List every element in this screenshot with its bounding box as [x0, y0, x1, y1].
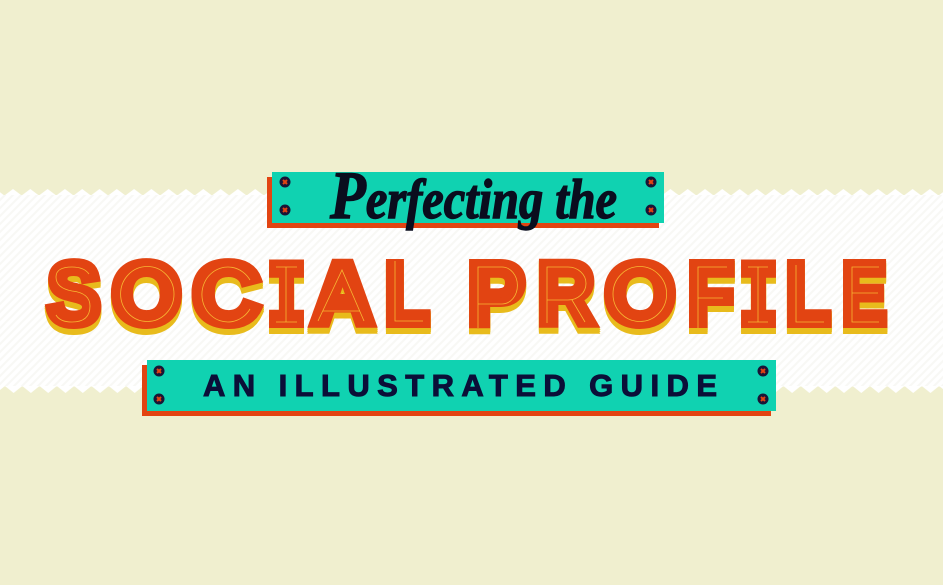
word: PROFILE: R	[538, 245, 595, 342]
screws	[154, 366, 768, 404]
word: SOCIAL: S	[47, 245, 100, 342]
word: PROFILE	[468, 245, 887, 352]
bottom ribbon: An illustrated guide	[142, 360, 776, 416]
word: PROFILE: O	[605, 245, 675, 342]
word: SOCIAL: C	[193, 246, 260, 343]
ribbon face	[147, 360, 776, 411]
main title: SOCIAL PROFILE	[47, 244, 887, 352]
word: SOCIAL	[47, 244, 429, 352]
word: PROFILE: E	[842, 246, 887, 343]
screws	[280, 176, 656, 216]
ribbon shadow	[267, 177, 659, 228]
top ribbon: Perfecting the	[267, 157, 664, 233]
inline detail on title letters	[56, 261, 879, 328]
word: PROFILE: P	[468, 246, 525, 343]
word: SOCIAL: A	[311, 246, 374, 343]
ribbon shadow	[142, 365, 771, 416]
word: SOCIAL: O	[112, 244, 181, 342]
subtitle: AN ILLUSTRATED GUIDE	[203, 368, 717, 403]
word: SOCIAL: I	[267, 248, 306, 352]
word: SOCIAL: L	[385, 245, 429, 342]
white zigzag band	[0, 189, 943, 393]
word: PROFILE: I	[739, 248, 778, 352]
script heading: Perfecting the	[329, 157, 617, 233]
ribbon face	[272, 172, 664, 223]
word: PROFILE: L	[786, 245, 830, 342]
word: PROFILE: F	[688, 246, 734, 343]
